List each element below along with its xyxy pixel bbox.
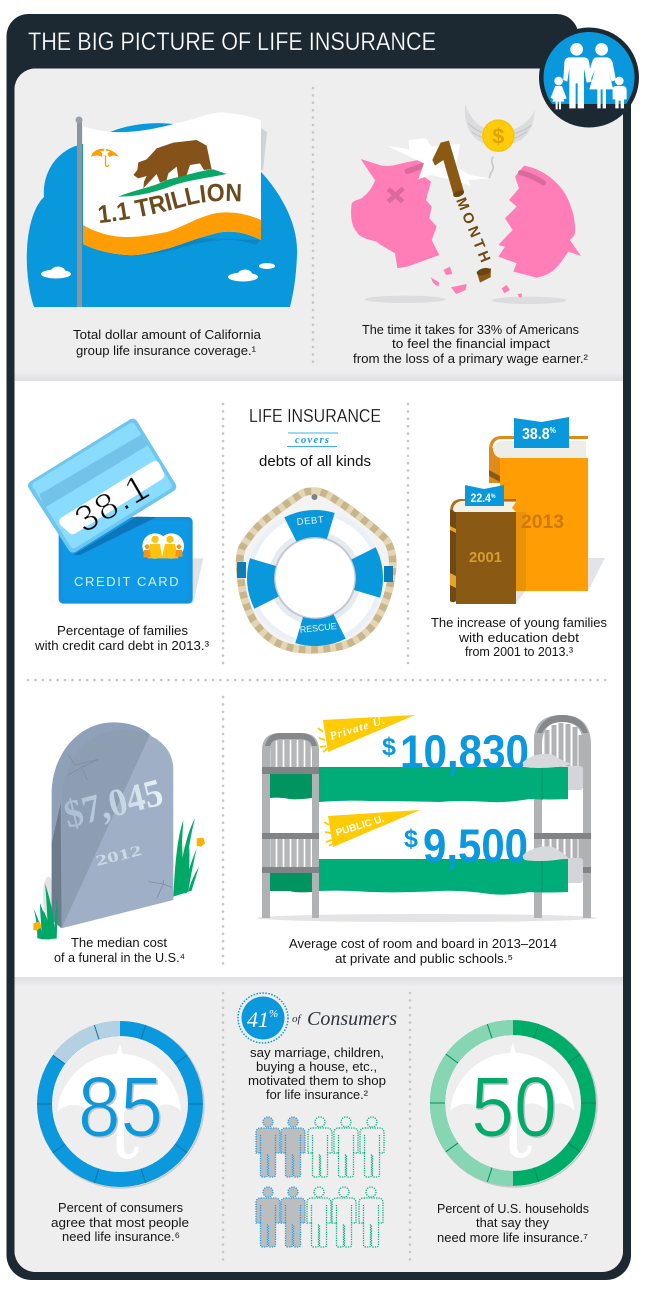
caption: books: The increase of young families <box>431 616 607 630</box>
caption: piggy <box>353 323 588 366</box>
caption: credit card: Percentage of families <box>57 624 188 638</box>
text: motivations: for life insurance.² <box>266 1088 368 1102</box>
caption: 85 percent: need life insurance.⁶ <box>62 1230 180 1244</box>
clouds <box>41 263 275 282</box>
chart: 85 percent ring <box>37 1022 204 1188</box>
chart: 50 percent ring: 50 <box>471 1060 557 1155</box>
caption: piggy: from the loss of a primary wage earner.² <box>353 352 588 366</box>
book shadows <box>516 558 605 604</box>
tilted card shadow <box>73 517 157 555</box>
tag 38.8% <box>514 417 569 448</box>
panel: broken piggy bank <box>351 104 581 304</box>
flag orange band <box>83 212 261 255</box>
shards <box>431 267 522 297</box>
flag amount <box>99 201 248 223</box>
caption: funeral <box>54 936 185 965</box>
book 2001: 2001 <box>469 549 502 566</box>
icon: life ring: DEBT <box>296 515 324 528</box>
signature panel <box>64 466 159 529</box>
stone front <box>62 730 173 928</box>
caption: bunk bed: at private and public schools.⁵ <box>335 952 513 966</box>
heading: life insurance covers debts: covers <box>295 435 329 446</box>
caption: books: from 2001 to 2013.³ <box>465 645 573 659</box>
flagpole <box>76 116 82 307</box>
pennant: private <box>318 715 415 752</box>
callout: 41 percent of consumers: 41 <box>247 1007 269 1032</box>
caption: piggy: to feel the financial impact <box>392 337 551 351</box>
big number one stick: 1 <box>444 155 452 171</box>
pennant: public <box>324 810 420 847</box>
callout: 41 percent of consumers: of <box>292 1013 302 1025</box>
caption: flag: group life insurance coverage.¹ <box>76 344 256 358</box>
bear on green ground <box>118 140 227 197</box>
caption: credit card <box>34 624 209 653</box>
icon: family badge <box>539 28 640 128</box>
pillows <box>523 754 571 861</box>
caption: piggy: The time it takes for 33% of Americans <box>362 323 579 337</box>
caption: 85 percent: Percent of consumers <box>58 1201 183 1215</box>
icon: life ring <box>237 491 393 652</box>
caption: funeral: The median cost <box>71 936 168 950</box>
book 2013 <box>489 436 588 591</box>
icon: orange umbrella with star <box>91 147 119 166</box>
panel: education debt books <box>450 417 605 604</box>
text: motivations: say marriage, children, <box>250 1046 384 1060</box>
icon: life ring: RESCUE <box>299 621 337 635</box>
icon: umbrella <box>57 1043 182 1159</box>
card shadow <box>190 558 203 603</box>
pennant: private: Private U. <box>328 715 386 743</box>
caption: 50 percent <box>437 1202 589 1245</box>
caption: 50 percent: need more life insurance.⁷ <box>437 1231 588 1245</box>
lower mattress <box>319 859 568 895</box>
icon: umbrella <box>450 1042 575 1158</box>
left frame <box>262 733 319 918</box>
caption: bunk bed <box>289 937 557 966</box>
amount engraved: $7,045 <box>60 771 167 837</box>
rope ties <box>237 562 246 578</box>
rope <box>240 491 393 650</box>
number 85: 85 <box>80 1062 164 1156</box>
panel: California flag: 1.1 TRILLION <box>98 184 241 223</box>
cracks <box>68 755 172 898</box>
caption: flag <box>73 328 261 358</box>
tilted card <box>33 424 171 548</box>
heading: life insurance covers debts <box>249 405 381 470</box>
tag 22.4% <box>465 485 504 506</box>
callout: 41 percent of consumers: Consumers <box>307 1008 397 1030</box>
callout: 41 percent of consumers: % <box>269 1008 278 1020</box>
chart: 85 percent ring: 85 <box>78 1060 163 1155</box>
wings and coin <box>465 104 535 143</box>
caption: credit card: with credit card debt in 2013.³ <box>34 639 209 653</box>
big number one stick <box>432 141 493 283</box>
caption: 50 percent: Percent of U.S. households <box>437 1202 589 1216</box>
figure: public cost: $ <box>404 825 418 853</box>
book 2013: 2013 <box>521 512 564 533</box>
handwritten figure: 38.1 <box>68 466 156 541</box>
blue sky blob <box>27 123 297 307</box>
overlap shadow <box>516 512 526 591</box>
year engraved: 2012 <box>94 843 144 870</box>
title: THE BIG PICTURE OF LIFE INSURANCE <box>28 28 436 56</box>
panel: tombstone <box>33 722 205 939</box>
right frame <box>534 715 591 918</box>
book 2001 <box>450 499 516 604</box>
pennant: public: PUBLIC U. <box>335 814 386 839</box>
caption: 50 percent: that say they <box>476 1216 550 1230</box>
family logo <box>142 533 184 559</box>
figure: private cost: $ <box>382 733 396 761</box>
chart: 50 percent ring <box>430 1021 597 1187</box>
panel: broken piggy bank: $ <box>492 124 504 148</box>
credit card label: CREDIT CARD <box>74 574 179 589</box>
flowers <box>197 838 205 847</box>
caption: 85 percent <box>51 1201 189 1244</box>
stone side <box>52 722 152 928</box>
left dark mattress ends <box>270 774 312 799</box>
panel: California flag <box>26 112 298 307</box>
left pig half <box>351 159 439 268</box>
figure: public cost: 9,500 <box>423 819 528 872</box>
magnetic stripe <box>39 434 148 508</box>
caption: funeral: of a funeral in the U.S.⁴ <box>54 951 185 965</box>
text: motivations: motivated them to shop <box>248 1074 386 1088</box>
chart: people pictogram <box>256 1117 384 1247</box>
caption: books: with education debt <box>458 631 580 645</box>
flag shadow <box>261 128 267 170</box>
ground shadows <box>364 296 567 304</box>
right pig half <box>498 166 581 278</box>
text: motivations: buying a house, etc., <box>256 1060 377 1074</box>
callout: 41 percent of consumers <box>238 993 397 1043</box>
tag 38.8%: 38.8 <box>522 426 553 443</box>
figure: private cost: 10,830 <box>400 725 529 778</box>
ring <box>261 524 369 632</box>
tag 22.4%: % <box>491 494 496 500</box>
big number one stick: MONTH <box>452 195 493 265</box>
floor shadow <box>257 914 597 922</box>
flag cloth <box>83 112 261 255</box>
back card <box>59 517 193 604</box>
mattress side pillows <box>560 766 583 790</box>
panel: credit card <box>33 424 203 604</box>
ground shadows <box>43 877 54 917</box>
panel: bunk bed <box>257 715 597 922</box>
tag 22.4%: 22.4 <box>470 491 494 505</box>
crash burst <box>387 138 490 186</box>
heading: life insurance covers debts: debts of all kinds <box>259 453 371 470</box>
caption: books <box>431 616 607 659</box>
heading: life insurance covers debts: LIFE INSURANCE <box>249 405 381 426</box>
nail <box>312 494 318 500</box>
number 50: 50 <box>472 1062 558 1156</box>
caption: 85 percent: agree that most people <box>51 1216 189 1230</box>
caption: flag: Total dollar amount of California <box>73 328 261 342</box>
upper mattress <box>319 767 568 802</box>
tag 38.8%: % <box>550 426 556 435</box>
grass <box>33 818 199 939</box>
text: motivations <box>248 1046 386 1102</box>
caption: bunk bed: Average cost of room and board in 2013–2014 <box>289 937 557 951</box>
